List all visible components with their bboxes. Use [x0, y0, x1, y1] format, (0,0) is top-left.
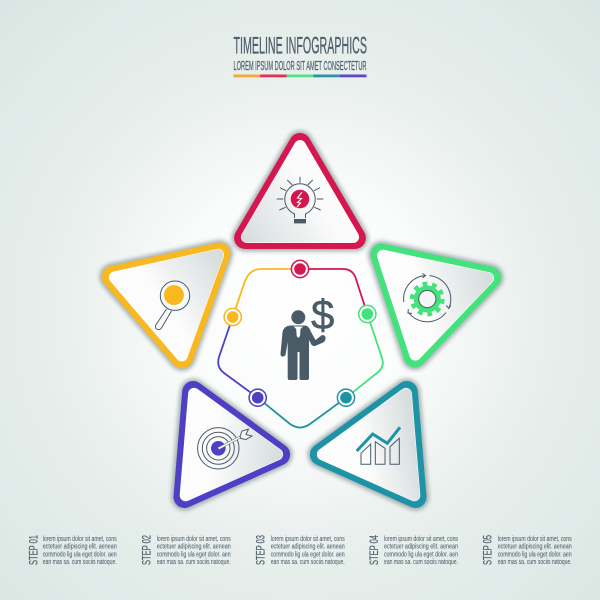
step 01 text: [43, 534, 117, 566]
panel: right triangle (green): [382, 254, 490, 357]
step 03 text: [271, 534, 345, 566]
icon: light bulb: [277, 177, 323, 223]
step 02 text: commodo lig ula eget dolor. aen: [157, 549, 231, 558]
panel: top triangle (red): [245, 144, 355, 238]
step 02: [142, 534, 231, 566]
node: red: [291, 260, 309, 278]
step 03: STEP 03: [256, 535, 268, 565]
step 05: [482, 534, 572, 566]
step 02: STEP 02: [142, 535, 154, 565]
node: green: [359, 305, 376, 323]
icon: businessman with dollar sign: $: [311, 291, 334, 338]
step 02 text: [157, 534, 231, 566]
icon: magnifying glass: [155, 281, 190, 330]
step 04: STEP 04: [369, 535, 381, 565]
icon: growth chart: [357, 427, 400, 464]
step 04 text: ean mas sa. cum sociis natoque.: [384, 557, 458, 566]
node: teal: [337, 389, 355, 406]
step 02 text: lorem ipsum dolor sit amet, cons: [157, 534, 231, 543]
step 05 text: [498, 534, 572, 566]
step 02 text: ean mas sa. cum sociis natoque.: [157, 557, 231, 566]
pentagon timeline path: [218, 260, 383, 428]
step 01: STEP 01: [28, 535, 40, 565]
text: LOREM IPSUM DOLOR SIT AMET CONSECTETUR: [234, 59, 366, 73]
step 04: [369, 534, 458, 566]
step 03 text: ectetuer adipiscing elit. aenean: [271, 542, 345, 551]
step 02 text: ectetuer adipiscing elit. aenean: [157, 542, 231, 551]
title block: [234, 32, 367, 77]
node: yellow: [224, 308, 241, 326]
panel: bottom-right triangle (teal): [321, 392, 416, 497]
step 03 text: lorem ipsum dolor sit amet, cons: [271, 534, 345, 543]
node: purple: [249, 389, 266, 406]
step 04 text: commodo lig ula eget dolor. aen: [384, 549, 458, 558]
step 03: [256, 534, 345, 566]
panel: bottom-left triangle (purple): [184, 392, 279, 497]
icon: gear with cycle arrows: [404, 274, 451, 322]
step 01: [28, 534, 117, 566]
step 05 text: ectetuer adipiscing elit. aenean: [498, 542, 572, 551]
step 03 text: ean mas sa. cum sociis natoque.: [271, 557, 345, 566]
colour bar: [234, 74, 366, 77]
step 03 text: commodo lig ula eget dolor. aen: [271, 549, 345, 558]
panel: left triangle (yellow): [113, 254, 220, 357]
step 04 text: ectetuer adipiscing elit. aenean: [384, 542, 458, 551]
icon: businessman with dollar sign: [280, 291, 334, 380]
step 01 text: ean mas sa. cum sociis natoque.: [43, 557, 117, 566]
step 04 text: [384, 534, 458, 566]
step 01 text: lorem ipsum dolor sit amet, cons: [43, 534, 117, 543]
step 05: STEP 05: [482, 535, 494, 565]
icon: target with arrow: [198, 428, 252, 469]
step 01 text: commodo lig ula eget dolor. aen: [43, 549, 117, 558]
step 01 text: ectetuer adipiscing elit. aenean: [43, 542, 117, 551]
text: TIMELINE INFOGRAPHICS: [234, 32, 367, 60]
step 04 text: lorem ipsum dolor sit amet, cons: [384, 534, 458, 543]
